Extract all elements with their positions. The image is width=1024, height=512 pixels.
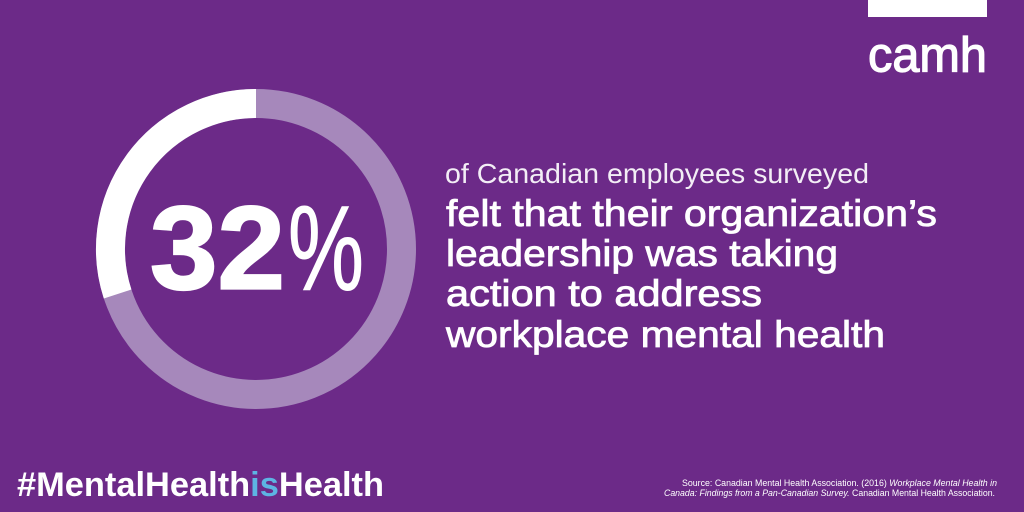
text block: statement: felt that their organization’s	[446, 193, 937, 234]
logo: camh	[868, 0, 987, 82]
percent sign: %	[288, 181, 364, 317]
donut chart: 32%	[110, 103, 401, 394]
source citation	[664, 478, 997, 498]
text block: statement: of Canadian employees surveyed	[445, 158, 869, 189]
logo: camh: camh	[868, 28, 987, 82]
hashtag: #MentalHealthisHealth	[17, 466, 384, 504]
text block: statement: leadership was taking	[446, 233, 838, 274]
source citation: Source: Canadian Mental Health Association. (2016) Workplace Mental Health in	[682, 478, 997, 488]
source citation: Canada: Findings from a Pan-Canadian Survey. Canadian Mental Health Association.	[664, 488, 995, 498]
statistic: 32: 32	[150, 182, 285, 314]
text block: statement	[445, 158, 937, 355]
text block: statement: action to address	[446, 273, 762, 314]
text block: statement: workplace mental health	[445, 314, 885, 355]
